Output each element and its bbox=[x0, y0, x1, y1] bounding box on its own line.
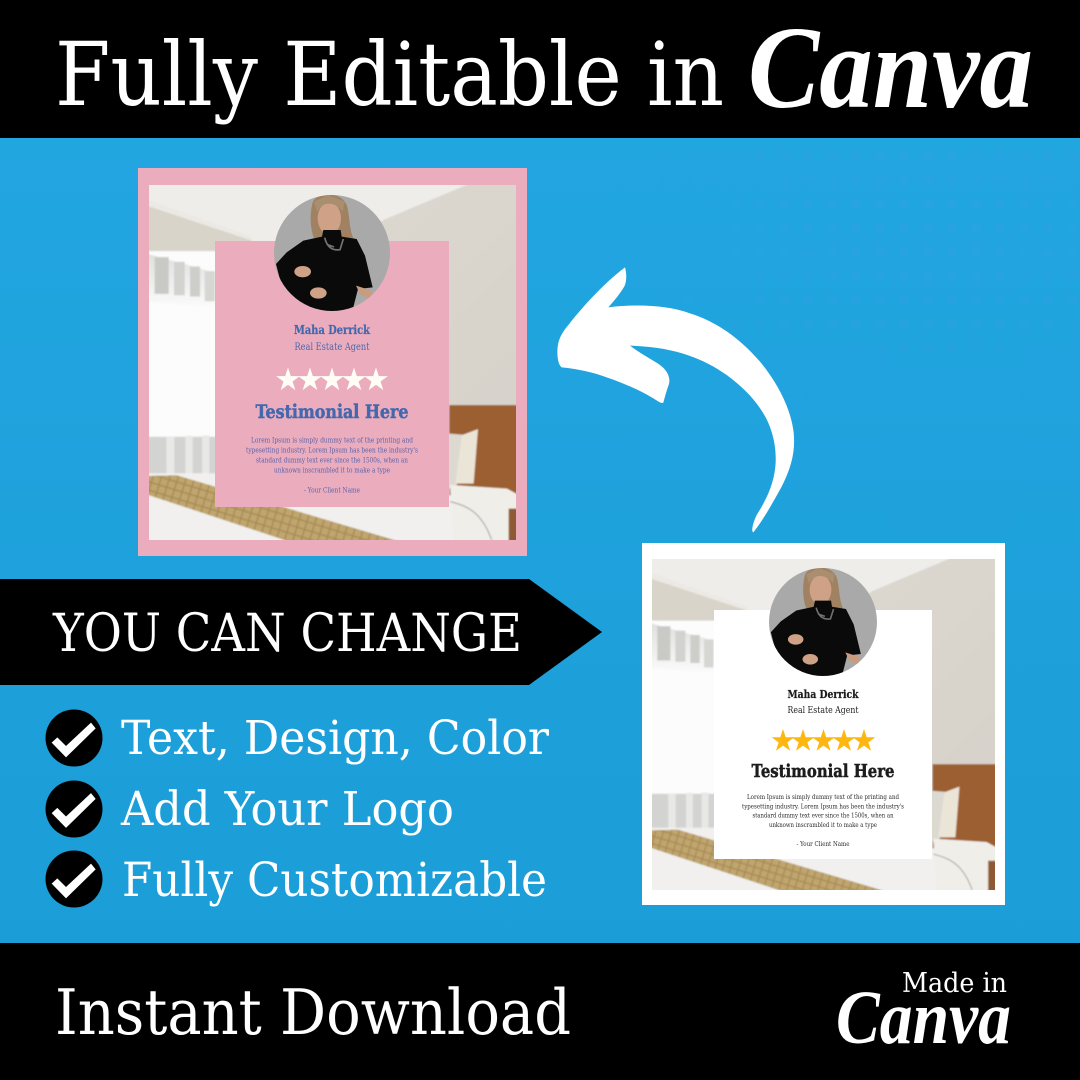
ribbon: YOU CAN CHANGE bbox=[0, 579, 602, 685]
title logo: Canva: Canva bbox=[748, 2, 1033, 133]
badge: Canva: Canva bbox=[836, 976, 1011, 1060]
checklist bbox=[46, 710, 549, 908]
badge: Made in: Made in bbox=[902, 968, 1007, 999]
title: Fully Editable in: Fully Editable in bbox=[55, 23, 724, 126]
panel: original white testimonial card bbox=[642, 543, 1007, 905]
panel: pink customised testimonial card bbox=[138, 168, 529, 556]
bedroom photo bbox=[642, 549, 1007, 902]
portrait bbox=[767, 565, 881, 680]
testimonial body: unknown inscrambled it to make a type bbox=[769, 821, 877, 829]
five star rating bbox=[276, 368, 388, 390]
testimonial body: Lorem Ipsum is simply dummy text of the printing and bbox=[747, 793, 900, 801]
arrow: from white card to pink card bbox=[557, 268, 794, 532]
name: Maha Derrick bbox=[294, 323, 371, 337]
bedroom photo bbox=[138, 174, 529, 553]
testimonial body: - Your Client Name bbox=[304, 486, 360, 494]
five star rating bbox=[772, 729, 875, 751]
testimonial body: typesetting industry. Lorem Ipsum has been the industry's bbox=[742, 802, 904, 810]
role: Real Estate Agent bbox=[788, 705, 859, 716]
name: Maha Derrick bbox=[788, 687, 859, 701]
ribbon label: YOU CAN CHANGE bbox=[52, 604, 522, 664]
testimonial body: typesetting industry. Lorem Ipsum has been the industry's bbox=[246, 446, 418, 454]
white testimonial panel bbox=[714, 610, 932, 859]
testimonial body: standard dummy text ever since the 1500s, when an bbox=[752, 812, 894, 820]
testimonial body bbox=[246, 436, 418, 494]
testimonial body bbox=[742, 793, 904, 848]
item: Fully Customizable: Fully Customizable bbox=[122, 853, 547, 908]
header band bbox=[0, 0, 1080, 138]
item: Text, Design, Color: Text, Design, Color bbox=[121, 711, 549, 766]
footer text: Instant Download: Instant Download bbox=[55, 976, 571, 1049]
pink testimonial panel bbox=[215, 241, 449, 507]
testimonial body: unknown inscrambled it to make a type bbox=[274, 466, 390, 474]
testimonial body: standard dummy text ever since the 1500s, when an bbox=[256, 456, 408, 464]
testimonial heading: Testimonial Here bbox=[256, 401, 408, 423]
portrait bbox=[271, 192, 395, 315]
item: Add Your Logo: Add Your Logo bbox=[120, 782, 454, 837]
testimonial heading: Testimonial Here bbox=[752, 761, 894, 782]
footer band bbox=[0, 943, 1080, 1080]
testimonial body: Lorem Ipsum is simply dummy text of the printing and bbox=[251, 436, 413, 444]
role: Real Estate Agent bbox=[294, 342, 370, 353]
testimonial body: - Your Client Name bbox=[796, 840, 850, 848]
